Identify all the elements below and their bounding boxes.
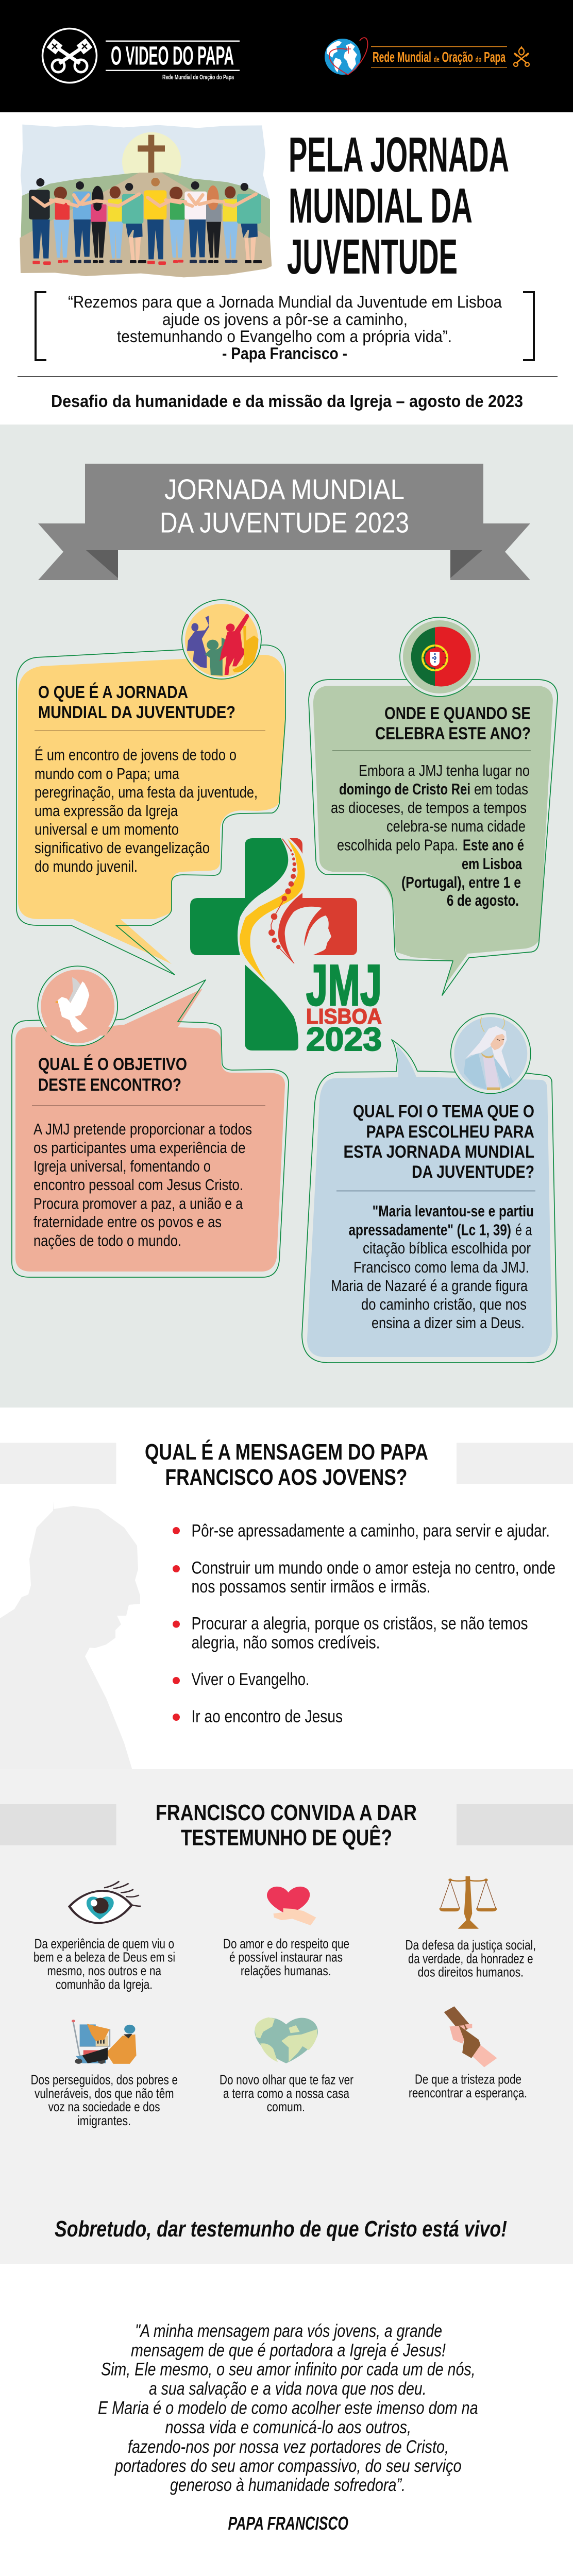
title (287, 127, 509, 284)
text (405, 1937, 536, 1980)
heading: DA JUVENTUDE? (412, 1162, 534, 1182)
logo: JMJ Lisboa 2023: JMJ (306, 953, 382, 1018)
closing quote: nossa vida e comunicá-lo aos outros, (165, 2417, 411, 2437)
body text: domingo de Cristo Rei (339, 780, 470, 798)
body text (331, 1202, 534, 1332)
body text: uma expressão da Igreja (35, 802, 178, 820)
logo: O Video do Papa: O VIDEO DO PAPA (111, 41, 234, 70)
text (409, 2072, 527, 2100)
heading (343, 1101, 534, 1182)
icon: homeless person with cart (72, 2020, 137, 2064)
banner: Jornada Mundial da Juventude 2023: DA JUVENTUDE 2023 (160, 506, 409, 539)
person 10 (206, 185, 222, 263)
icon: heart in hand (267, 1887, 316, 1925)
closing quote: fazendo-nos por nossa vez portadores de Cristo, (128, 2437, 449, 2457)
text: voz na sociedade e dos (48, 2099, 160, 2114)
heading (145, 1439, 428, 1490)
text: bem e a beleza de Deus em si (33, 1950, 175, 1965)
heading (375, 704, 531, 743)
body text: em todas (474, 780, 528, 798)
body text: É um encontro de jovens de todo o (35, 746, 237, 764)
header band (0, 0, 573, 112)
text: De que a tristeza pode (415, 2072, 521, 2087)
person 12 (237, 183, 262, 263)
bullet list: Viver o Evangelho. (192, 1670, 309, 1689)
person 1 (29, 178, 51, 265)
logo: JMJ Lisboa 2023 (190, 838, 382, 1058)
body text: apressadamente" (Lc 1, 39) (348, 1221, 511, 1239)
heading: FRANCISCO CONVIDA A DAR (156, 1800, 417, 1825)
quote with brackets: - Papa Francisco - (222, 344, 347, 363)
closing quote: E Maria é o modelo de como acolher este imenso dom na (98, 2398, 478, 2418)
person 3 (73, 181, 91, 263)
body text: citação bíblica escolhida por (363, 1239, 531, 1257)
panel: onde e quando (309, 617, 558, 995)
person 4 (91, 186, 107, 263)
logo: O Video do Papa (42, 29, 240, 82)
text: mesmo, nos outros e na (47, 1963, 161, 1978)
heading: QUAL FOI O TEMA QUE O (353, 1101, 534, 1121)
logo: JMJ Lisboa 2023: LISBOA (306, 1004, 382, 1028)
illustration: youth facing the cross on a hill (20, 125, 272, 277)
body text: Procura promover a paz, a união e a (33, 1194, 243, 1213)
panel: mensagem do Papa (0, 1408, 573, 1770)
person 11 (223, 186, 238, 263)
person 7 (144, 178, 166, 265)
bullet list: nos possamos sentir irmãos e irmãs. (192, 1577, 431, 1597)
body text: os participantes uma experiência de (33, 1139, 245, 1157)
text: relações humanas. (241, 1963, 331, 1978)
heading: PAPA ESCOLHEU PARA (366, 1122, 534, 1142)
quote with brackets: “Rezemos para que a Jornada Mundial da Juventude em Lisboa (68, 293, 502, 311)
bullet list: Ir ao encontro de Jesus (192, 1707, 343, 1726)
body text: celebra-se numa cidade (386, 817, 526, 835)
quote with brackets: testemunhando o Evangelho com a própria vida”. (117, 327, 452, 346)
closing quote (98, 2321, 478, 2534)
icon: scales (439, 1876, 497, 1929)
logo: O Video do Papa: Rede Mundial de Oração do Papa (162, 73, 234, 81)
text: Do novo olhar que te faz ver (220, 2072, 353, 2088)
bullet list (173, 1521, 555, 1726)
body text: "Maria levantou-se e partiu (373, 1202, 534, 1220)
heading: TESTEMUNHO DE QUÊ? (181, 1825, 392, 1851)
body text: fraternidade entre os povos e as (33, 1213, 222, 1231)
body text: do caminho cristão, que nos (361, 1295, 527, 1313)
closing quote: portadores do seu amor compassivo, do seu serviço (114, 2456, 462, 2476)
body text: Igreja universal, fomentando o (33, 1157, 211, 1175)
text: imigrantes. (77, 2113, 131, 2128)
heading: FRANCISCO AOS JOVENS? (165, 1465, 407, 1490)
body text: Embora a JMJ tenha lugar no (359, 761, 530, 779)
silhouette: Pope Francis (0, 1501, 140, 1770)
person 6 (122, 183, 146, 263)
body text (33, 1120, 252, 1250)
text: dos direitos humanos. (418, 1964, 524, 1980)
text: Do amor e do respeito que (223, 1936, 349, 1952)
signature: PAPA FRANCISCO (228, 2513, 348, 2534)
text (223, 1936, 349, 1978)
text: Da experiência de quem viu o (35, 1936, 174, 1952)
closing quote: a sua salvação e a vida nova que nos deu. (149, 2379, 427, 2399)
person 9 (184, 181, 207, 263)
closing quote: "A minha mensagem para vós jovens, a grande (135, 2321, 442, 2341)
panel: testemunho (0, 1769, 573, 2264)
text: vulneráveis, dos que não têm (35, 2086, 174, 2101)
body text: A JMJ pretende proporcionar a todos (33, 1120, 252, 1138)
text: Dos perseguidos, dos pobres e (31, 2072, 178, 2088)
body text: ensina a dizer sim a Deus. (372, 1314, 525, 1332)
heading: ONDE E QUANDO SE (384, 704, 531, 723)
icon: Portugal flag (400, 617, 479, 697)
panel: o que é a JMJ (16, 600, 285, 975)
text: da verdade, da honradez e (408, 1951, 533, 1967)
body text: Maria de Nazaré é a grande figura (331, 1277, 528, 1295)
subtitle: Desafio da humanidade e da missão da Igreja – agosto de 2023 (51, 392, 523, 411)
text: Da defesa da justiça social, (405, 1937, 536, 1953)
heading (38, 1055, 187, 1095)
body text: Francisco como lema da JMJ. (353, 1258, 529, 1276)
body text: significativo de evangelização (35, 839, 210, 857)
closing quote: generoso à humanidade sofredora”. (170, 2475, 406, 2495)
logo: Rede Mundial de Oração do Papa (325, 38, 529, 75)
person 2 (54, 187, 70, 263)
panel: Jornada Mundial background (0, 425, 573, 1408)
body text: Este ano é (463, 836, 524, 854)
icon: hands clasping (444, 2006, 497, 2067)
heading: ESTA JORNADA MUNDIAL (343, 1142, 534, 1162)
heading: QUAL É O OBJETIVO (38, 1055, 187, 1074)
text: reencontrar a esperança. (409, 2085, 527, 2100)
body text: é a (515, 1221, 532, 1239)
body text: do mundo juvenil. (35, 857, 138, 875)
body text (331, 761, 530, 909)
heading: O QUE É A JORNADA (38, 683, 188, 702)
closing quote: Sim, Ele mesmo, o seu amor infinito por cada um de nós, (101, 2360, 476, 2380)
body text: em Lisboa (462, 855, 523, 873)
logo: JMJ Lisboa 2023: 2023 (306, 1021, 382, 1058)
body text: encontro pessoal com Jesus Cristo. (33, 1176, 243, 1194)
body text: 6 de agosto. (447, 891, 519, 909)
body text: nações de todo o mundo. (33, 1232, 181, 1250)
icon: heart-shaped earth (255, 2018, 318, 2063)
heading: QUAL É A MENSAGEM DO PAPA (145, 1439, 428, 1465)
closing quote: mensagem de que é portadora a Igreja é Jesus! (131, 2341, 446, 2361)
heading (156, 1800, 417, 1851)
person 5 (108, 186, 123, 263)
body text (35, 746, 258, 875)
heading: MUNDIAL DA JUVENTUDE? (38, 703, 235, 722)
linked arms (33, 194, 256, 206)
body text: universal e um momento (35, 820, 179, 838)
body text: mundo com o Papa; uma (35, 765, 180, 783)
bullet list: alegria, não somos credíveis. (192, 1633, 380, 1652)
banner: Jornada Mundial da Juventude 2023: JORNADA MUNDIAL (164, 473, 405, 505)
text (31, 2072, 178, 2128)
heading (38, 683, 235, 722)
body text: escolhida pelo Papa. (337, 836, 458, 854)
body text: peregrinação, uma festa da juventude, (35, 783, 258, 801)
text (220, 2072, 353, 2114)
text: comum. (267, 2099, 305, 2114)
banner: Jornada Mundial da Juventude 2023 (38, 464, 530, 580)
icon: jumping youth (182, 600, 261, 679)
person 8 (169, 187, 184, 263)
text: é possível instaurar nas (229, 1950, 343, 1965)
text (33, 1936, 175, 1992)
icon: eye (70, 1881, 141, 1923)
text: a terra como a nossa casa (223, 2086, 349, 2101)
text: comunhão da Igreja. (56, 1977, 153, 1992)
body text: as dioceses, de tempos a tempos (331, 799, 527, 817)
quote with brackets (36, 292, 534, 363)
icon: dove (38, 966, 117, 1046)
heading: CELEBRA ESTE ANO? (375, 724, 531, 743)
panel: objetivo (12, 966, 289, 1277)
logo: Rede Mundial de Oração do Papa: Rede Mundial de Oração do Papa (373, 49, 505, 65)
body text: (Portugal), entre 1 e (401, 873, 521, 891)
icon: Mary (451, 1014, 531, 1093)
heading: DESTE ENCONTRO? (38, 1075, 181, 1095)
panel: tema (302, 1014, 557, 1363)
quote with brackets: ajude os jovens a pôr-se a caminho, (162, 310, 408, 329)
